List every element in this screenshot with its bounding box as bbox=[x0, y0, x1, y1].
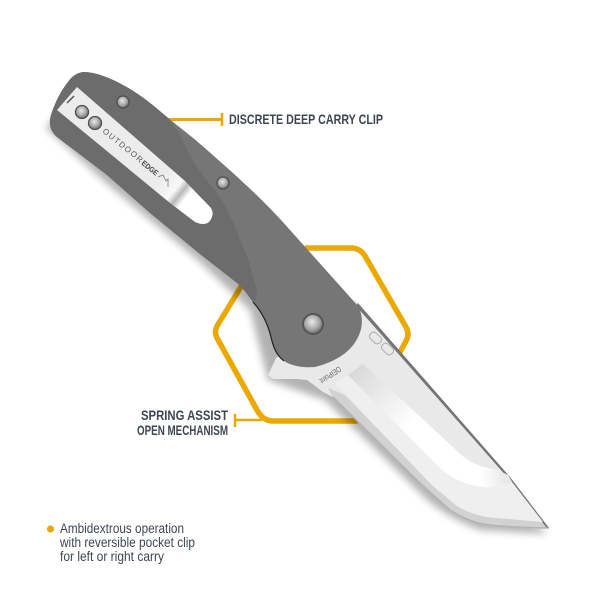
knife bbox=[50, 72, 549, 528]
polished grind band bbox=[348, 364, 512, 487]
pocket clip: EDGE bbox=[140, 159, 160, 178]
label: spring assist open mechanism: SPRING ASSIST bbox=[141, 407, 228, 423]
feature bullet: Ambidextrous operation bbox=[60, 521, 184, 536]
spine edge bbox=[356, 303, 549, 528]
lower grind bbox=[335, 375, 543, 522]
bevel outer edge bbox=[333, 397, 549, 528]
handle bbox=[50, 72, 362, 367]
blade body bbox=[268, 300, 549, 528]
callout hexagon bbox=[216, 248, 408, 421]
label: spring assist open mechanism: OPEN MECHANISM bbox=[137, 422, 228, 438]
handle bolster edge bbox=[253, 302, 284, 361]
handle contour bbox=[50, 72, 257, 302]
lower bevel bbox=[328, 388, 549, 528]
feature bullet: for left or right carry bbox=[60, 549, 164, 564]
pocket clip bbox=[57, 87, 213, 224]
knife shadow bbox=[46, 80, 548, 534]
leader line: deep carry clip bbox=[168, 113, 222, 126]
rivets bbox=[76, 96, 323, 334]
feature bullet: with reversible pocket clip bbox=[59, 535, 195, 550]
blade steel stamps bbox=[368, 331, 395, 356]
feature bullet bbox=[47, 521, 195, 564]
blade bbox=[268, 300, 549, 528]
label: discrete deep carry clip: DISCRETE DEEP CARRY CLIP bbox=[229, 111, 383, 127]
leader line: spring assist bbox=[235, 414, 262, 427]
label: spring assist open mechanism bbox=[137, 407, 228, 438]
blade text: OEIPoint bbox=[318, 364, 343, 386]
clip logo: OUTDOOR bbox=[101, 127, 145, 165]
